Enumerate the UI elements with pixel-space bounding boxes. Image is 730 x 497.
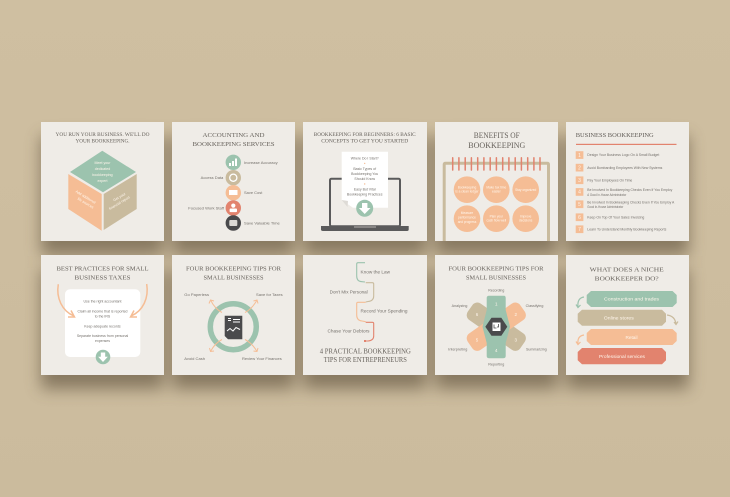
timeline labels: Know the Law [360,270,391,274]
title: best practices: BEST PRACTICES FOR SMALL [56,266,149,272]
benefit circles: performance [458,216,476,220]
icon: down arrow [96,350,110,364]
hexagonal process diagram: 2 [514,312,517,317]
connector arrows [576,297,678,344]
numbered list: 6 [578,215,581,221]
cube diagram [68,151,137,231]
numbered list: Good In-House Administrator [587,205,624,209]
cube diagram: bookkeeping [92,173,113,177]
process labels: Interpreting [448,347,467,351]
cube diagram: file sources [77,197,95,210]
numbered list: 3 [578,178,581,184]
white practices card: Keep adequate records [84,324,121,328]
white practices card: Use the right accountant [84,300,121,304]
panel: business bookkeeping list [566,122,689,241]
benefit circles: easier [492,190,502,194]
process labels [448,288,547,366]
hexagonal process diagram: 4 [495,348,498,353]
service labels: Save Valuable Time [244,221,280,226]
hexagonal process diagram: 3 [514,338,517,342]
service labels: Access Data [201,175,224,180]
cube diagram: dedicated [95,167,110,171]
panel: bookkeeping for beginners [303,122,427,241]
numbered list: 2 [578,165,581,171]
title: accounting services: BOOKKEEPING SERVICES [192,141,275,148]
notepad [444,158,548,241]
title: best practices [56,266,149,282]
tip labels: Review Your Finances [242,356,282,361]
white practices card: to the IRS [95,314,111,318]
panel: you run your business [41,122,164,241]
service labels: Focused Work Staff [188,206,225,211]
timeline labels: Chase Your Debtors [328,328,370,334]
title: 4 practical tips: 4 PRACTICAL BOOKKEEPING [320,348,411,355]
numbered list: 4 [578,190,581,196]
timeline labels [328,270,408,334]
numbered list: Design Your Business Logo On A Small Budget [587,153,659,157]
title: 4 practical tips [320,348,411,364]
title: four tips process: SMALL BUSINESSES [466,274,526,281]
title: 4 practical tips: TIPS FOR ENTREPRENEURS [324,357,407,364]
title: niche bookkeeper: BOOKKEEPER DO? [595,275,659,282]
service labels: Increase Accuracy [244,160,278,165]
tip labels: Go Paperless [184,292,209,297]
title: accounting services [192,132,275,148]
title: four tips process: FOUR BOOKKEEPING TIPS FOR [448,266,544,272]
option bars: Retail [626,335,637,340]
title: best practices: BUSINESS TAXES [74,274,131,282]
benefit circles: decisions [519,218,533,222]
document card: Bookkeeping You [351,172,378,176]
ring [210,304,256,350]
numbered list: Keep On Top Of Your Sales Invoicing [587,216,644,220]
document card: Bookkeeping Practices [347,192,383,196]
title: bookkeeping for beginners: BOOKKEEPING FOR BEGINNERS: 6 BASIC [314,132,416,138]
benefit circles: cash flow well [486,218,506,222]
numbered list: Learn To Understand Monthly Bookkeeping Reports [587,228,667,232]
numbered list: Be Involved In Bookkeeping Checks Even If You Employ A [587,200,675,204]
benefit circles: Bookkeeping [458,186,476,190]
title: four tips: FOUR BOOKKEEPING TIPS FOR [186,266,282,272]
panel: accounting and bookkeeping services [172,122,295,241]
service labels: Save Cost [244,190,263,195]
document card: Basic Types of [353,167,376,171]
title: four tips [186,266,282,281]
title: you run your business: YOU RUN YOUR BUSINESS. WE'LL DO [56,132,150,138]
title: accounting services: ACCOUNTING AND [202,132,265,139]
numbered list: Pay Your Employees On Time [587,178,632,182]
numbered list: A Good In-House Administrator [587,193,627,197]
title: four tips: SMALL BUSINESSES [204,274,264,281]
benefit circles: Measure [461,211,473,215]
hexagonal process diagram: 6 [476,312,479,317]
cube diagram: Meet your [95,161,111,165]
white practices card: Separate business from personal [77,334,128,338]
service labels [188,160,280,226]
process labels: Reporting [488,362,504,366]
option bars: Online stores [604,316,635,320]
cube diagram: Get your [113,191,127,202]
panel: four bookkeeping tips ring [172,255,295,375]
panel: benefits of bookkeeping [435,122,558,241]
numbered list [576,151,675,233]
stepped timeline [357,263,374,342]
document card: Easy But Vital [354,188,376,192]
benefit circles: Stay organized [515,188,537,192]
panel: 4 practical bookkeeping tips [303,255,427,375]
title: niche bookkeeper [590,266,664,282]
title: you run your business: YOUR BOOKKEEPING. [76,139,130,145]
white practices card [65,289,140,357]
title: benefits of bookkeeping: BENEFITS OF [474,131,520,140]
title: bookkeeping for beginners [314,132,416,145]
cube diagram: financial report [108,195,131,211]
document card [342,152,388,208]
panel: four bookkeeping tips process [435,255,558,375]
laptop illustration [321,179,409,231]
benefit circles: Make tax time [486,186,506,190]
hexagonal process diagram: 1 [495,302,498,306]
cube diagram: Add additional [75,190,96,205]
process labels: Recording [488,288,504,292]
process labels: Classifying [526,304,543,308]
benefit circles [454,176,539,232]
arrow: right curved [130,284,147,317]
numbered list: 5 [578,202,581,208]
white practices card: expenses [95,339,110,343]
hexagonal process diagram: 5 [476,338,479,342]
tip labels: Save for Taxes [256,292,283,297]
benefit circles: is a clean ledger [455,190,480,194]
timeline labels: Don't Mix Personal [330,290,368,294]
panel: best practices for small business taxes [41,255,164,375]
benefit circles: Improve [520,214,532,218]
tip labels [184,292,283,361]
hexagonal process diagram [464,296,528,358]
cube diagram: expert [98,179,108,183]
panel: what does a niche bookkeeper do [566,255,689,375]
icon: financial document [225,316,242,339]
title: four tips process [448,266,544,281]
option bars [578,291,677,364]
title: benefits of bookkeeping: BOOKKEEPING [468,141,526,150]
tip labels: Avoid Cash [184,356,205,361]
title: bookkeeping for beginners: CONCEPTS TO GET YOU STARTED [321,139,408,145]
numbered list: Be Involved In Bookkeeping Checks Even If You Employ [587,188,673,192]
benefit circles: and progress [458,220,477,224]
numbered list: 7 [578,227,581,233]
title: niche bookkeeper: WHAT DOES A NICHE [590,266,664,273]
numbered list: 1 [578,153,581,159]
process labels: Analyzing [452,304,467,308]
icon: download arrow [356,200,373,217]
option bars: Construction and trades [604,296,660,302]
numbered list: Avoid Bombarding Employees With New Systems [587,166,663,170]
title: you run your business [56,132,150,145]
white practices card: Claim all income that is reported [78,310,128,314]
title: benefits of bookkeeping [468,131,526,150]
arrows: four directions [209,300,258,352]
service icon circles [226,155,241,231]
arrow: left curved [58,284,74,317]
document card: Should Know [354,177,375,181]
timeline labels: Record Your Spending [360,308,408,314]
option bars: Professional services [599,354,646,359]
process labels: Summarizing [526,347,547,351]
title: business bookkeeping: BUSINESS BOOKKEEPING [576,132,654,139]
benefit circles: Plan your [490,214,504,218]
document card: Where Do I Start? [351,156,379,160]
